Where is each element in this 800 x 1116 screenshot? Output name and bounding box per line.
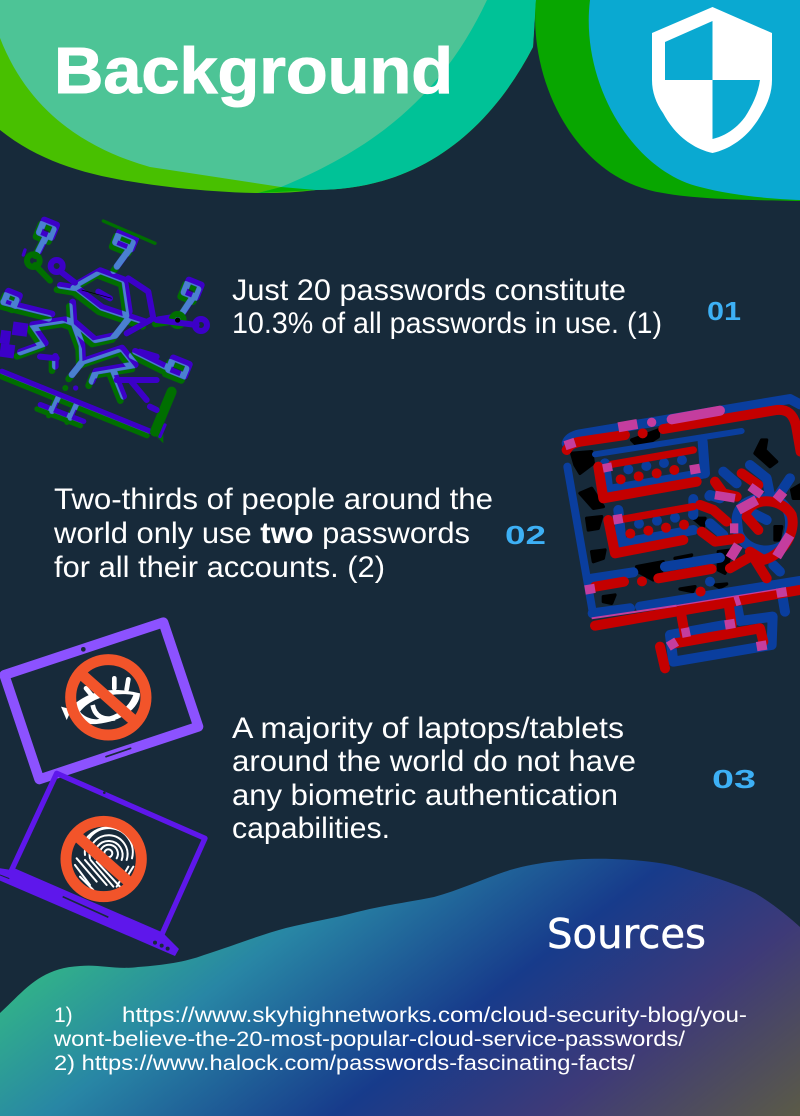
icon: monitor with bug bbox=[565, 399, 800, 668]
text: fact 3 bbox=[232, 712, 636, 845]
panel: top right header shapes bbox=[535, 0, 800, 201]
text: fact 3: capabilities. bbox=[232, 812, 390, 845]
icon: tablet with blocked eye bbox=[4, 622, 198, 779]
red layer bbox=[567, 410, 800, 668]
text: source list: wont-believe-the-20-most-popular-cloud-service-passwords/ bbox=[53, 1028, 685, 1051]
icon: laptop with blocked fingerprint bbox=[0, 773, 205, 956]
text: fact 2: Two-thirds of people around the bbox=[54, 483, 493, 516]
green extras bbox=[27, 221, 184, 432]
checker bbox=[0, 320, 28, 360]
panel: top left header shapes bbox=[0, 0, 536, 193]
text: fact 1: 10.3% of all passwords in use. (1) bbox=[232, 307, 662, 340]
panel: sources blob bbox=[0, 859, 800, 1116]
text: fact 2: for all their accounts. (2) bbox=[54, 551, 385, 584]
text: fact 1 bbox=[232, 274, 662, 340]
heading: Sources: Sources bbox=[547, 910, 706, 958]
purple extras bbox=[23, 250, 207, 437]
number 01: 01 bbox=[707, 296, 741, 326]
icon: shield bbox=[652, 7, 772, 153]
black blotches bbox=[572, 430, 800, 603]
eye bbox=[61, 660, 146, 735]
text: fact 1: Just 20 passwords constitute bbox=[232, 274, 626, 307]
text: fact 3: around the world do not have bbox=[232, 745, 636, 778]
text: fact 3: any biometric authentication bbox=[232, 779, 618, 812]
heading: Background: Background bbox=[54, 34, 453, 107]
text: source list: 2) https://www.halock.com/passwords-fascinating-facts/ bbox=[54, 1052, 635, 1075]
prohibition sign bbox=[66, 821, 141, 897]
blue layer bbox=[567, 399, 800, 662]
text: source list bbox=[53, 1004, 747, 1075]
number 03: 03 bbox=[712, 764, 756, 794]
icon: key shield illustration bbox=[0, 220, 207, 443]
fingerprint bbox=[75, 827, 137, 890]
text: fact 3: A majority of laptops/tablets bbox=[232, 712, 624, 745]
text: fact 2 bbox=[53, 483, 493, 584]
text: source list: https://www.skyhighnetworks.com/cloud-security-blog/you- bbox=[122, 1004, 747, 1027]
text: fact 2: world only use two passwords bbox=[53, 517, 470, 550]
pink overlaps bbox=[565, 411, 790, 647]
number 02: 02 bbox=[505, 520, 546, 550]
text: source list: 1) bbox=[54, 1004, 73, 1027]
prohibition sign bbox=[71, 660, 146, 735]
